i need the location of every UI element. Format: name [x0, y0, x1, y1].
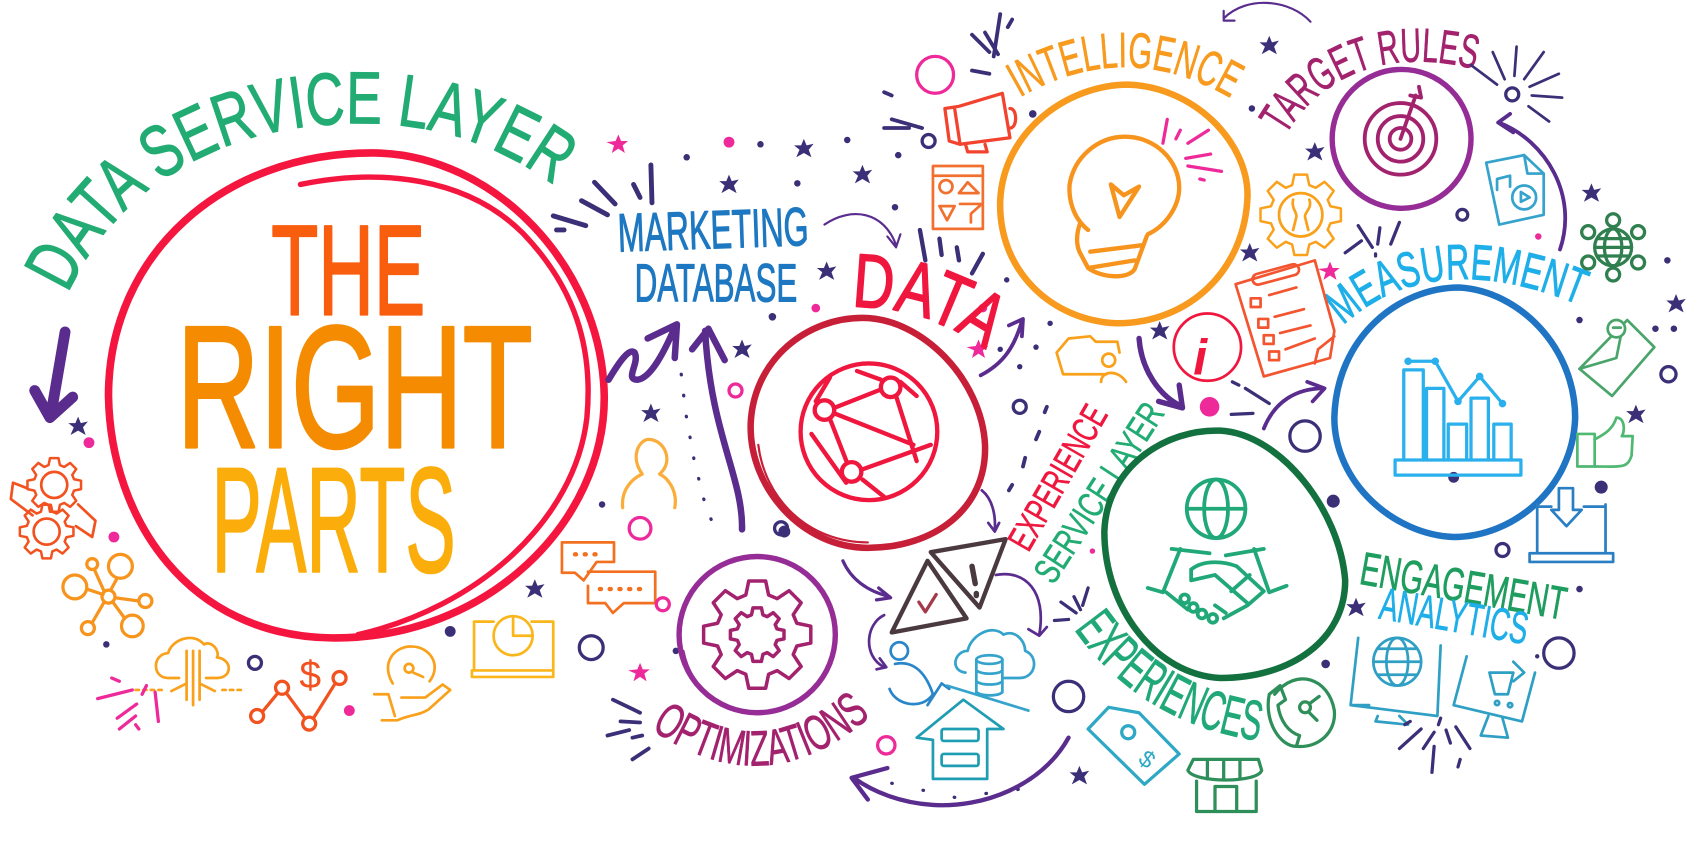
icon: navy burst bottom left: [608, 700, 649, 759]
icon: globe and handshake: [1148, 479, 1287, 623]
icon: laptop pie chart: [472, 616, 553, 677]
icon: phone support: [1268, 679, 1335, 747]
arrows: around triangles: [843, 490, 1047, 669]
icon: bar chart: [1395, 359, 1521, 475]
heading: measurement: MEASUREMENT: [1323, 244, 1592, 324]
icon: navy burst left: [553, 165, 652, 230]
heading: data service layer: DATA SERVICE LAYER: [24, 72, 575, 290]
heading: optimizations: OPTIMIZATIONS: [656, 693, 867, 766]
icon: network globe: [801, 363, 937, 500]
icon: pink burst: [98, 678, 158, 729]
icon: store: [1188, 759, 1262, 811]
icon: megaphone: [945, 93, 1016, 152]
heading: target rules: TARGET RULES: [1258, 28, 1480, 130]
panel: experiences circle: [1104, 431, 1345, 678]
heading: data: DATA: [856, 254, 1000, 350]
heading: service layer: SERVICE LAYER: [1026, 395, 1172, 590]
panel: the right parts: [24, 72, 608, 642]
icon: gears: [11, 458, 95, 558]
icon: info: [1174, 314, 1241, 385]
icon: network globe green: [1582, 214, 1645, 281]
heading: analytics: ANALYTICS: [1376, 578, 1532, 654]
icon: wrench gear: [1261, 175, 1341, 255]
icon: chat bubbles: [562, 542, 655, 613]
arrow: top curve: [1224, 3, 1310, 22]
arrow: thin to data: [824, 214, 900, 247]
red hand-drawn circle: [108, 153, 604, 638]
icon: warning triangles: [892, 539, 1006, 632]
icon: cart monitor: [1454, 656, 1535, 738]
panel: optimizations circle: [679, 557, 835, 714]
icon: navy dashes near arrow: [1231, 382, 1269, 414]
icon: gear: [704, 581, 811, 688]
arrow: optimizations to marketing database: [692, 329, 742, 529]
heading: marketing database: [617, 197, 810, 314]
panel: target rules circle: [1332, 69, 1471, 208]
heading: intelligence: INTELLIGENCE: [1005, 32, 1246, 98]
panel: measurement circle: [1334, 287, 1575, 537]
heading: engagement: ENGAGEMENT: [1356, 542, 1571, 630]
heading: experience: EXPERIENCE: [1000, 398, 1116, 557]
icon: navy burst near experiences: [1054, 588, 1088, 621]
icon: navy burst near intelligence: [884, 14, 1012, 128]
heading: marketing database: DATABASE: [635, 254, 797, 314]
arrow: data to intelligence: [981, 319, 1023, 375]
heading: experiences: EXPERIENCES: [1075, 608, 1262, 740]
icon: mail: [1580, 320, 1654, 396]
icon: navy burst bottom right: [1399, 718, 1470, 772]
icon: pink sparks: [1163, 119, 1222, 180]
icon: info: i: [1193, 329, 1208, 385]
panel: intelligence circle: [1000, 85, 1248, 323]
arrow: down purple: [35, 332, 73, 418]
icon: navy burst near target: [1471, 47, 1562, 122]
icon: globe monitor: [1351, 638, 1441, 725]
title: the right parts: [177, 200, 533, 604]
arrow: measurement to target: [1498, 114, 1565, 250]
icon: blue person with cloud and home: [890, 630, 1034, 779]
icon: folder user: [1057, 336, 1126, 382]
icon: navy burst near measurement: [1345, 222, 1399, 256]
icon: laptop download: [1530, 488, 1613, 562]
icon: dollar trend: $: [299, 654, 321, 697]
icon: network hub: [63, 554, 152, 637]
panel: data circle: [751, 318, 985, 548]
icon: person: [622, 439, 675, 508]
icon: burst above data: [920, 230, 983, 273]
arrow: experience to measurement: [1264, 382, 1325, 429]
icon: thumbs up: [1577, 418, 1633, 467]
icon: hand gauge: [374, 647, 450, 720]
title: the right parts: RIGHT: [177, 290, 533, 484]
icon: checklist: [1236, 260, 1334, 376]
icon: cloud circuit: [136, 638, 244, 705]
icon: target: [1365, 87, 1436, 175]
icon: music file: [1486, 155, 1544, 225]
title: the right parts: THE: [271, 200, 425, 343]
arrow: experiences to optimizations: [852, 738, 1069, 805]
icon: price tag: [1088, 707, 1179, 784]
icon: dollar trend: [251, 654, 346, 730]
icon: price tag: $: [1133, 745, 1160, 774]
heading: marketing database: MARKETING: [617, 197, 810, 264]
arrow: wavy to marketing database: [609, 324, 677, 380]
icon: light bulb: [1069, 137, 1179, 276]
title: the right parts: PARTS: [212, 436, 456, 604]
arrow: intelligence to experience: [1139, 338, 1182, 408]
icon: media gallery: [933, 166, 983, 229]
